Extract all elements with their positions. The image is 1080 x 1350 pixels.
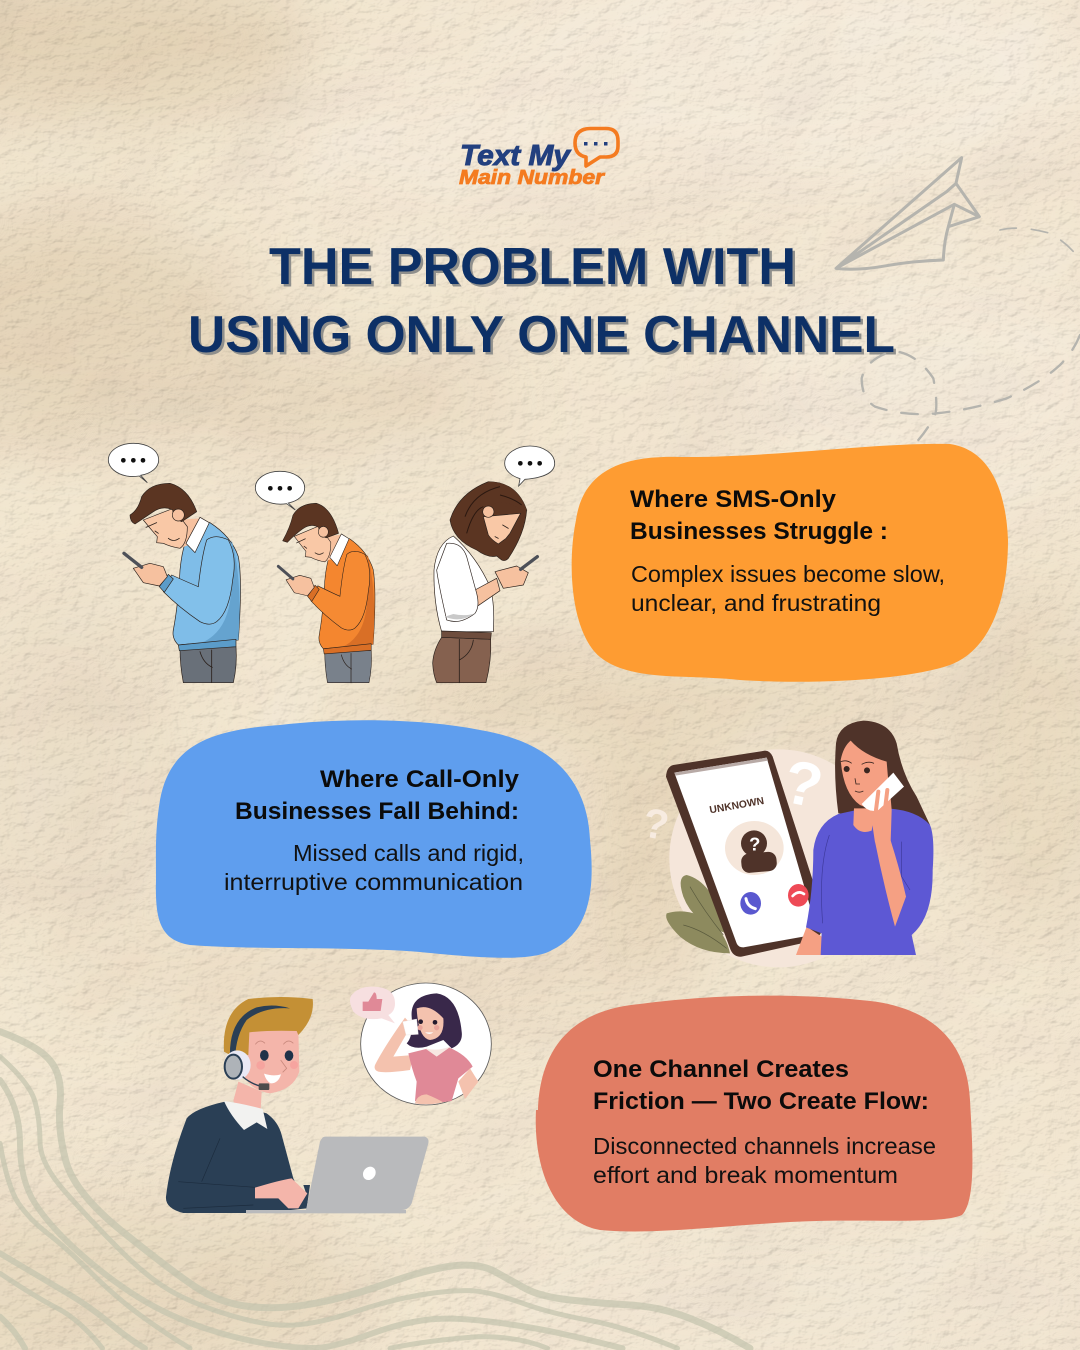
illustration: three people texting <box>108 443 555 683</box>
icon: question marks: ? <box>639 798 673 849</box>
panel: Call-only <box>156 720 592 958</box>
speech bubble <box>255 471 305 510</box>
panel: One channel vs two <box>536 996 972 1231</box>
text: friction and flow: effort and break momentum <box>593 1162 898 1188</box>
person: boy in orange sweater <box>255 471 375 683</box>
title <box>188 238 898 366</box>
person: man in blue sweater <box>108 443 240 683</box>
logo wordmark bottom: Main Number <box>459 167 605 189</box>
text: SMS-only <box>631 561 945 616</box>
leaves <box>666 875 730 953</box>
icon: question marks: ? <box>777 747 829 822</box>
logo chat bubble icon <box>575 128 618 166</box>
icon: paper airplane with dashed flight path <box>836 158 1080 440</box>
woman with phone <box>796 721 933 955</box>
thumbs-up bubble <box>350 987 395 1023</box>
caller avatar: ? <box>749 834 760 855</box>
answer button <box>740 892 761 915</box>
decline button <box>788 884 809 907</box>
title: USING ONLY ONE CHANNEL <box>188 306 895 364</box>
heading: SMS-only <box>630 486 888 545</box>
illustration: woman receiving unknown call <box>639 721 933 967</box>
text: Call-only: Missed calls and rigid, <box>293 840 524 866</box>
illustration: support agent and happy customer <box>166 983 491 1213</box>
text: SMS-only: Complex issues become slow, <box>631 561 945 587</box>
decorative contour lines <box>0 1032 750 1348</box>
phone showing UNKNOWN caller <box>666 751 827 957</box>
caller label: UNKNOWN <box>709 796 765 816</box>
heading: friction and flow: One Channel Creates <box>593 1056 849 1083</box>
laptop <box>246 1137 429 1213</box>
person: woman in white blouse <box>433 446 555 683</box>
text: friction and flow <box>593 1133 936 1188</box>
text: Call-only <box>224 840 524 895</box>
heading: friction and flow <box>593 1056 929 1115</box>
title: USING ONLY ONE CHANNEL <box>190 308 898 366</box>
customer circle <box>350 983 491 1105</box>
text: friction and flow: Disconnected channels increase <box>593 1133 936 1159</box>
heading: SMS-only: Businesses Struggle : <box>630 518 888 545</box>
agent <box>166 997 429 1213</box>
caller avatar <box>725 821 784 875</box>
backdrop circle <box>669 749 887 967</box>
handset <box>862 773 904 811</box>
logo: Text My Main Number <box>459 128 618 189</box>
text: Call-only: interruptive communication <box>224 869 523 895</box>
text: SMS-only: unclear, and frustrating <box>631 590 881 616</box>
heading: SMS-only: Where SMS-Only <box>630 486 837 513</box>
heading: Call-only <box>235 766 520 825</box>
logo wordmark top: Text My <box>460 140 572 172</box>
heading: Call-only: Where Call-Only <box>320 766 520 793</box>
heading: friction and flow: Friction — Two Create Flow: <box>593 1088 929 1115</box>
icon: question marks <box>639 747 829 849</box>
title: THE PROBLEM WITH <box>272 240 798 298</box>
speech bubble <box>505 446 555 486</box>
heading: Call-only: Businesses Fall Behind: <box>235 798 519 825</box>
panel: SMS-only <box>572 444 1008 682</box>
speech bubble <box>108 443 159 483</box>
title: THE PROBLEM WITH <box>269 238 796 296</box>
